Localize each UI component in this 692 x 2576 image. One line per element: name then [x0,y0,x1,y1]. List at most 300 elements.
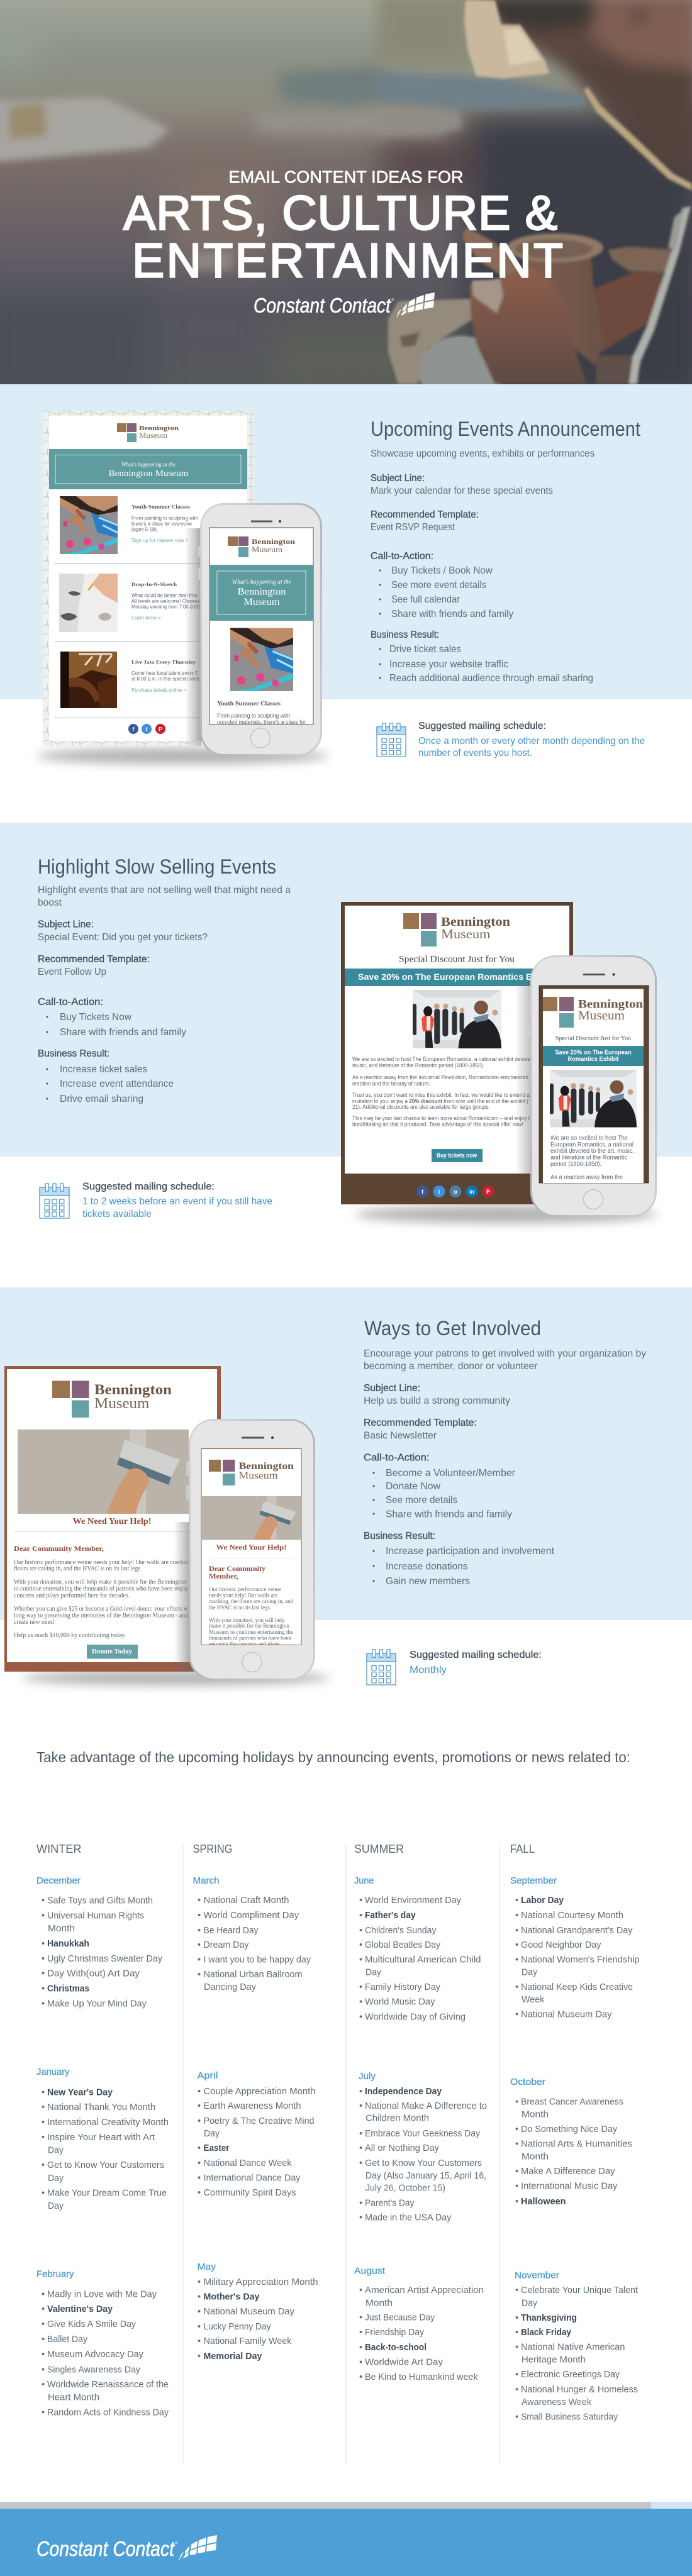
intro: Showcase upcoming events, exhibits or performances [371,448,594,459]
month: November: Heritage Month [522,2355,586,2365]
phone mockup: need your help: cracking, the floors are caving in, and [209,1598,293,1604]
month: April: Day [204,2129,220,2139]
email shadow [355,1206,657,1223]
email body copy: Our historic performance venue needs your help! Our walls are crackin [14,1559,188,1566]
phone mockup: need your help: Museum [239,1469,278,1482]
email body copy: Trust us, you don't want to miss this exhibit. In fact, we would like to extend a [352,1092,530,1098]
photo: gallery group [413,990,501,1048]
phone mockup: upcoming events: Youth Summer Classes [217,701,281,707]
month: May: • [198,2292,201,2302]
month: June: • [359,1997,362,2007]
month: April: • [198,2174,201,2184]
month: August: • [359,2328,362,2338]
subject line: Subject Line: [371,473,425,484]
month: January: Day [48,2174,64,2184]
month: September: Good Neighbor Day [521,1940,601,1950]
social icons: f [132,726,135,732]
event row 1 [60,496,198,554]
call to action [38,997,186,1038]
phone mockup: need your help: the HVAC is on its last legs. [209,1604,271,1611]
email body copy: Whether you can give $25 or become a Gold-level donor, your efforts w [14,1606,189,1613]
month: February: February [36,2269,74,2279]
month: June: Multicultural American Child [365,1955,481,1965]
email body copy: floors are caving in, and the HVAC is on its last legs. [14,1565,142,1572]
phone mockup: special discount: Museum [578,1009,625,1023]
month: November: Awareness Week [522,2397,592,2407]
recommended template: Recommended Template: [371,509,479,520]
social icons: f [421,1189,424,1195]
month: January: Make Your Dream Come True [47,2189,167,2199]
month: June: World Environment Day [365,1896,462,1906]
month: August: • [359,2313,362,2323]
phone mockup: special discount: Bennington [578,997,643,1011]
month: July: • [359,2158,362,2168]
month: November: • [515,2385,518,2395]
event row 1: Sign up for classes now > [131,538,188,543]
business result: Increase donations [386,1561,468,1572]
month: February: Heart Month [48,2392,99,2402]
recommended template [364,1418,477,1441]
footer logo: Constant Contact [36,2537,176,2560]
social icons: P [486,1189,490,1195]
phone mockup: upcoming events: Museum [252,545,282,554]
recommended template: Recommended Template: [38,954,150,965]
business result: Increase ticket sales [60,1064,147,1075]
month: March: • [198,1911,201,1921]
month: May: Memorial Day [204,2351,262,2362]
text block: ways to get involved [364,1317,646,1587]
business result: Gain new members [386,1576,470,1587]
month: March [193,1875,311,1992]
month: July: • [359,2212,362,2223]
phone mockup: upcoming events: What's happening at the [232,579,292,586]
month: February: • [42,2289,45,2299]
social icons [416,1185,494,1197]
month: March: • [198,1970,201,1980]
month: September: Day [522,1967,538,1977]
month: February: Madly in Love with Me Day [47,2289,157,2299]
month: November: National Hunger & Homeless [521,2385,638,2395]
teal banner: What's happening at the [121,462,176,468]
month: October: • [515,2124,518,2135]
event row 3: Live Jazz Every Thursday [131,659,196,665]
month: October: Month [522,2109,549,2119]
suggested mailing schedule: Suggested mailing schedule: [410,1650,542,1660]
museum logo: Museum [94,1396,150,1412]
heading: Ways to Get Involved [364,1317,541,1340]
email body copy: concerts and plays performed here for decades. [14,1592,130,1599]
hero title line 1: ARTS, CULTURE & [123,186,557,240]
subject line: Special Event: Did you get your tickets? [38,932,208,943]
email mockup: upcoming events [43,411,254,746]
email salutation: Dear Community Member, [14,1544,104,1553]
phone mockup: upcoming events: recycled materials, there's a class for [217,719,306,725]
social icons [128,724,165,734]
social icons: o [454,1189,457,1195]
business result: Reach additional audience through email sharing [389,673,593,684]
event row 1: Youth Summer Classes [131,503,191,509]
teal banner: Exhibit [526,972,555,982]
month: November: Celebrate Your Unique Talent [521,2285,638,2296]
month: December: • [42,1984,45,1994]
month: December: • [42,1999,45,2009]
month: January [36,2067,169,2211]
month: November: National Native American [521,2342,625,2352]
recommended template: Basic Newsletter [364,1430,437,1441]
hero logo: ® [391,298,394,303]
button: Buy tickets now [437,1152,477,1160]
phone mockup: need your help [186,1420,315,1679]
month: February: • [42,2365,45,2375]
event row 1: there's a class for everyone [131,521,193,527]
business result: Business Result: [38,1048,109,1059]
month: April: • [198,2188,201,2198]
call to action: See more event details [391,580,486,591]
month: May [198,2262,318,2362]
month: November: • [515,2412,518,2423]
holidays heading: Take advantage of the upcoming holidays by announcing events, promotions or news related to: [36,1749,630,1765]
month: October: Do Something Nice Day [521,2124,618,2135]
month: May: • [198,2351,201,2362]
intro [364,1348,646,1372]
event row 3: at 8:00 p.m. in this special serie [131,676,200,682]
hero eyebrow: EMAIL CONTENT IDEAS FOR [229,167,463,186]
month: January: International Creativity Month [47,2118,169,2128]
month: December: Hanukkah [47,1939,89,1949]
footer band [0,2502,692,2576]
month: January: • [42,2189,45,2199]
month: December: • [42,1896,45,1906]
column: winter [36,1842,169,2418]
month: August: Back-to-school [365,2343,427,2353]
month: July: July [359,2071,376,2082]
month: December: Day With(out) Art Day [47,1968,140,1979]
month: June: Worldwide Day of Giving [365,2012,466,2023]
call to action: Share with friends and family [60,1027,186,1038]
email body copy: This may be your last chance to learn more about Romanticism – and enjoy t [352,1115,530,1121]
email body copy [14,1559,189,1639]
month: March: March [193,1875,219,1886]
intro [38,885,291,908]
month: September: • [515,1911,518,1921]
month: April: • [198,2158,201,2168]
month: May: National Museum Day [204,2307,295,2317]
month: October [510,2077,632,2207]
event row 3: Purchase tickets online > [131,687,186,693]
month: April: Community Spirit Days [204,2188,296,2198]
month: December: Make Up Your Mind Day [47,1999,147,2009]
museum logo: Bennington [94,1382,172,1397]
month: November: • [515,2342,518,2352]
month: June: Day [366,1967,382,1977]
teal banner [49,449,247,489]
email subhead: Special Discount Just for You [399,955,515,965]
phone mockup: need your help: make it possible for the Bennington [209,1623,289,1629]
phone mockup: need your help: Bennington [239,1461,294,1472]
month: September: Labor Day [521,1896,564,1906]
museum logo [52,1381,172,1418]
email body copy: to continue entertaining the thousands of patrons who have been enjoy [14,1585,188,1592]
month: April: April [198,2070,218,2081]
button [432,1149,483,1162]
month: September: • [515,2010,518,2020]
month: June: • [359,2012,362,2023]
email body copy: With your donation, you will help make it possible for the Bennington [14,1579,186,1586]
suggested mailing schedule: Suggested mailing schedule: [82,1181,215,1192]
phone mockup: upcoming events: Museum [244,597,280,608]
text block: upcoming events [371,418,640,684]
month: July: All or Nothing Day [365,2143,440,2153]
season heading: WINTER [36,1842,82,1855]
month: November: Day [522,2298,538,2308]
month: June [354,1875,481,2023]
museum logo [117,423,179,442]
month: February: • [42,2380,45,2390]
subject line: Mark your calendar for these special events [371,486,553,496]
intro: Highlight events that are not selling well that might need a [38,885,291,896]
season heading: FALL [510,1842,535,1855]
month: June: June [354,1875,374,1886]
phone mockup: special discount [528,956,656,1216]
email body copy: As a reaction away from the Industrial Revolution, Romanticism emphasized [352,1074,528,1080]
month: March: National Urban Ballroom [204,1970,302,1980]
month: July: Parent's Day [365,2199,415,2209]
call to action: See full calendar [391,594,460,605]
month: July: • [359,2129,362,2139]
month: January: January [36,2067,70,2077]
business result [364,1531,555,1587]
month: September: National Keep Kids Creative [521,1982,633,1992]
phone mockup: need your help: Member, [209,1572,238,1580]
phone mockup: upcoming events [198,504,321,755]
month: December: Universal Human Rights [47,1911,144,1921]
month: March: Dream Day [204,1940,249,1950]
season heading: SPRING [193,1842,233,1855]
month: October: Month [522,2152,549,2162]
call to action: Donate Now [386,1481,440,1492]
hero title line 2: ENTERTAINMENT [132,234,563,288]
event row 1: From painting to sculpting with [131,516,198,521]
email body copy: emotion and the beauty of nature. [352,1080,430,1087]
email body copy: long way to preserving the memories of the Bennington Museum - and [14,1613,188,1619]
month: September: National Grandparent's Day [521,1926,633,1936]
month: June: Father's day [365,1911,415,1921]
event row 2 [59,574,200,632]
business result: Business Result: [371,630,439,640]
suggested mailing schedule: tickets available [82,1209,152,1219]
email body copy: create new ones! [14,1619,55,1626]
month: January: Get to Know Your Customers [47,2160,164,2170]
month: September: • [515,1926,518,1936]
suggested mailing schedule [410,1650,542,1675]
museum logo: Museum [441,926,491,941]
month: September: National Museum Day [521,2010,612,2020]
month: March: National Craft Month [204,1896,289,1906]
email body copy: music, and literature of the Romantic period (1800-1850). [352,1062,484,1069]
suggested mailing schedule: number of events you host. [418,748,532,758]
month: August: • [359,2357,362,2367]
icon: calendar [40,1184,69,1218]
month: August: Month [366,2298,393,2308]
call to action: Call-to-Action: [38,997,103,1008]
month: February: Worldwide Renaissance of the [47,2380,169,2390]
subject line: Help us build a strong community [364,1396,510,1406]
month: April: Couple Appreciation Month [204,2087,316,2097]
suggested mailing schedule: Monthly [410,1665,447,1675]
email body copy [352,1056,557,1127]
panel: upcoming events shadow [36,748,328,764]
month: April: Earth Awareness Month [204,2101,301,2111]
month: December: • [42,1954,45,1964]
season heading: SUMMER [354,1842,404,1855]
call to action: Buy Tickets Now [60,1012,131,1023]
month: May: • [198,2336,201,2346]
month: February: Random Acts of Kindness Day [47,2407,169,2418]
month: May: National Family Week [204,2336,292,2346]
month: July: Independence Day [365,2087,442,2097]
teal banner: Save 20% on The European Romantics [358,972,523,982]
month: September [510,1875,639,2020]
phone mockup: need your help: Our historic performance venue [209,1586,281,1592]
recommended template: Event RSVP Request [371,522,455,533]
month: February: • [42,2407,45,2418]
phone mockup: need your help: thousands of patrons who have been [209,1635,291,1641]
month: November: • [515,2370,518,2380]
month: October: Make A Difference Day [521,2167,615,2177]
month: December [36,1875,163,2009]
teal banner: Bennington Museum [108,469,189,479]
business result: Increase your website traffic [389,659,508,670]
teal banner [345,969,569,986]
email mockup: special discount [341,902,573,1204]
email shadow [22,1670,330,1685]
month: October: International Music Day [521,2181,618,2191]
month: July: Day (Also January 15, April 16, [366,2171,486,2181]
month: February: Give Kids A Smile Day [47,2319,137,2329]
month: July: • [359,2143,362,2153]
month: January: • [42,2133,45,2143]
social icons: P [159,726,162,732]
month: July: Get to Know Your Customers [365,2158,482,2168]
column: summer [354,1842,487,2382]
month: August: • [359,2285,362,2296]
month: May: Military Appreciation Month [204,2277,318,2287]
social icons: in [469,1189,474,1195]
month: October: Halloween [521,2197,566,2207]
event row 2: Learn more > [131,615,161,621]
month: April: National Dance Week [204,2158,292,2168]
button: Donate Today [92,1648,132,1655]
month: June: Children's Sunday [365,1926,437,1936]
month: May: • [198,2277,201,2287]
suggested mailing schedule [82,1181,272,1219]
month: April: • [198,2116,201,2126]
month: August: Friendship Day [365,2328,425,2338]
heading: Upcoming Events Announcement [371,418,640,440]
month: March: World Compliment Day [204,1911,299,1921]
month: September: • [515,1982,518,1992]
business result: Increase event attendance [60,1079,174,1089]
phone mockup: upcoming events: Bennington [252,537,295,546]
email headline: We Need Your Help! [73,1517,151,1526]
month: May: • [198,2307,201,2317]
email body copy: invitation to you: enjoy a 20% discount from now until the end of the exhibit ( [352,1098,528,1104]
recommended template: Event Follow Up [38,967,106,977]
month: October: • [515,2181,518,2191]
month: August: Be Kind to Humankind week [365,2372,478,2382]
month: October: • [515,2097,518,2107]
month: July [359,2071,487,2223]
month: September: September [510,1875,557,1886]
suggested mailing schedule: Suggested mailing schedule: [418,721,546,731]
month: November: Small Business Saturday [521,2412,618,2423]
intro: Encourage your patrons to get involved with your organization by [364,1348,646,1359]
month: December: Ugly Christmas Sweater Day [47,1954,163,1964]
museum logo: Bennington [139,425,179,432]
month: February: • [42,2319,45,2329]
phone mockup: upcoming events: From painting to sculpting with [217,713,290,719]
subject line [38,919,208,943]
month: January: National Thank You Month [47,2102,155,2112]
month: January: • [42,2102,45,2112]
month: June: • [359,1911,362,1921]
month: April: Easter [204,2143,230,2153]
phone mockup: need your help: With your donation, you will help [209,1617,285,1623]
month: April: International Dance Day [204,2174,301,2184]
footer logo: ® [175,2541,178,2546]
heading: Highlight Slow Selling Events [38,855,276,878]
month: March: Be Heard Day [204,1926,259,1936]
month: February: Museum Advocacy Day [47,2350,144,2360]
month: April: • [198,2101,201,2111]
month: November: November [515,2270,559,2280]
phone mockup: special discount: Special Discount Just for You [555,1035,631,1042]
month: September: • [515,1955,518,1965]
month: February: • [42,2350,45,2360]
phone mockup: special discount: We are so excited to host The [550,1135,628,1142]
month: January: • [42,2118,45,2128]
phone mockup: special discount: exhibit devoted to the art, music, [550,1148,634,1155]
month: June: • [359,1982,362,1992]
month: October: National Arts & Humanities [521,2140,632,2150]
column: fall [510,1842,639,2423]
call to action [371,551,513,619]
month: July: Embrace Your Geekness Day [365,2129,481,2139]
photo: plastering a wall [18,1430,189,1514]
recommended template: Recommended Template: [364,1418,477,1428]
month: January: • [42,2088,45,2098]
month: September: National Women's Friendship [521,1955,639,1965]
suggested mailing schedule [418,721,645,758]
month: January: Day [48,2146,64,2156]
month: December: • [42,1939,45,1949]
month: March: I want you to be happy day [204,1955,311,1965]
month: June: • [359,1896,362,1906]
hero photo background [0,0,692,406]
panel: ways to get involved background [0,1287,692,1620]
month: November [515,2270,638,2423]
call to action [364,1453,516,1519]
phone mockup: need your help: enjoying the concerts and plays [209,1640,279,1646]
month: August: Worldwide Art Day [365,2357,444,2367]
museum logo: Bennington [441,915,510,929]
call to action: Become a Volunteer/Member [386,1468,516,1479]
icon: calendar [377,723,406,757]
month: June: • [359,1926,362,1936]
month: September: • [515,1896,518,1906]
month: November: • [515,2313,518,2323]
month: June: World Music Day [365,1997,435,2007]
